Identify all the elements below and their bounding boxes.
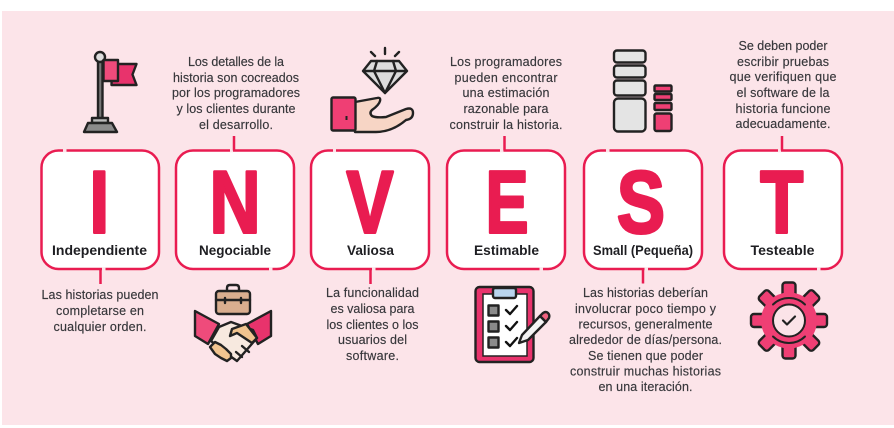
- description S: recursos, generalmente: [578, 318, 713, 332]
- description N: el desarrollo.: [199, 118, 273, 132]
- card E: E: [486, 154, 528, 252]
- description V: usuarios del: [338, 333, 407, 347]
- description T: adecuadamente.: [736, 117, 830, 131]
- description S: Las historias deberían: [583, 286, 708, 300]
- icon: flag: [84, 52, 136, 132]
- description S: construir muchas historias: [570, 364, 721, 378]
- card T: [724, 136, 842, 269]
- card E: Estimable: [474, 242, 539, 258]
- column E: Estimable: [447, 55, 565, 362]
- description T: [730, 39, 837, 131]
- card T: Testeable: [750, 242, 815, 258]
- description S: involucrar poco tiempo y: [575, 302, 717, 316]
- description N: historia son cocreados: [173, 71, 299, 85]
- description N: Los detalles de la: [188, 55, 284, 69]
- description V: es valiosa para: [330, 302, 415, 316]
- description T: Se deben poder: [738, 39, 828, 53]
- description I: Las historias pueden: [42, 288, 159, 302]
- description S: alrededor de días/persona.: [569, 333, 722, 347]
- description S: Se tienen que poder: [588, 349, 703, 363]
- card T: T: [760, 153, 803, 251]
- description V: software.: [346, 349, 399, 363]
- icon: stacks of blocks: [614, 50, 672, 132]
- description V: La funcionalidad: [326, 286, 419, 300]
- description E: construir la historia.: [450, 118, 562, 132]
- card S: [584, 150, 702, 284]
- description S: [569, 286, 722, 394]
- icon: checklist and pencil: [476, 287, 549, 362]
- card V: V: [347, 153, 393, 251]
- icon: gear with check: [751, 282, 827, 358]
- card V: Valiosa: [347, 242, 394, 258]
- card I: [42, 150, 159, 284]
- description N: [172, 55, 300, 132]
- card S: S: [617, 154, 665, 252]
- description I: [42, 288, 159, 334]
- description N: y los clientes durante: [176, 102, 296, 116]
- card V: [311, 150, 429, 284]
- description E: pueden encontrar: [454, 71, 558, 85]
- column I: Independiente: [42, 52, 159, 334]
- column V: Valiosa: [311, 48, 429, 363]
- description E: Los programadores: [450, 55, 562, 69]
- description T: historia funcione: [736, 102, 831, 116]
- card I: I: [90, 153, 109, 251]
- card N: [176, 136, 294, 269]
- card S: Small (Pequeña): [593, 242, 693, 258]
- description S: en una iteración.: [598, 380, 692, 394]
- card I: Independiente: [52, 242, 147, 258]
- card N: N: [210, 153, 260, 251]
- description V: [326, 286, 419, 363]
- column S: Small: [569, 50, 722, 394]
- card E: [447, 136, 565, 269]
- description E: [450, 55, 562, 132]
- description T: que verifiquen que: [730, 70, 837, 84]
- card N: Negociable: [199, 242, 271, 258]
- icon: handshake and briefcase: [195, 285, 271, 361]
- description E: razonable para: [464, 102, 549, 116]
- description V: los clientes o los: [326, 318, 418, 332]
- description N: por los programadores: [172, 86, 300, 100]
- description T: escribir pruebas: [737, 55, 829, 69]
- column T: Testeable: [724, 39, 842, 358]
- description I: completarse en: [56, 304, 144, 318]
- column N: Negociable: [172, 55, 300, 361]
- icon: diamond on hand: [332, 48, 413, 132]
- description I: cualquier orden.: [54, 320, 146, 334]
- description T: el software de la: [736, 86, 830, 100]
- description E: una estimación: [462, 86, 550, 100]
